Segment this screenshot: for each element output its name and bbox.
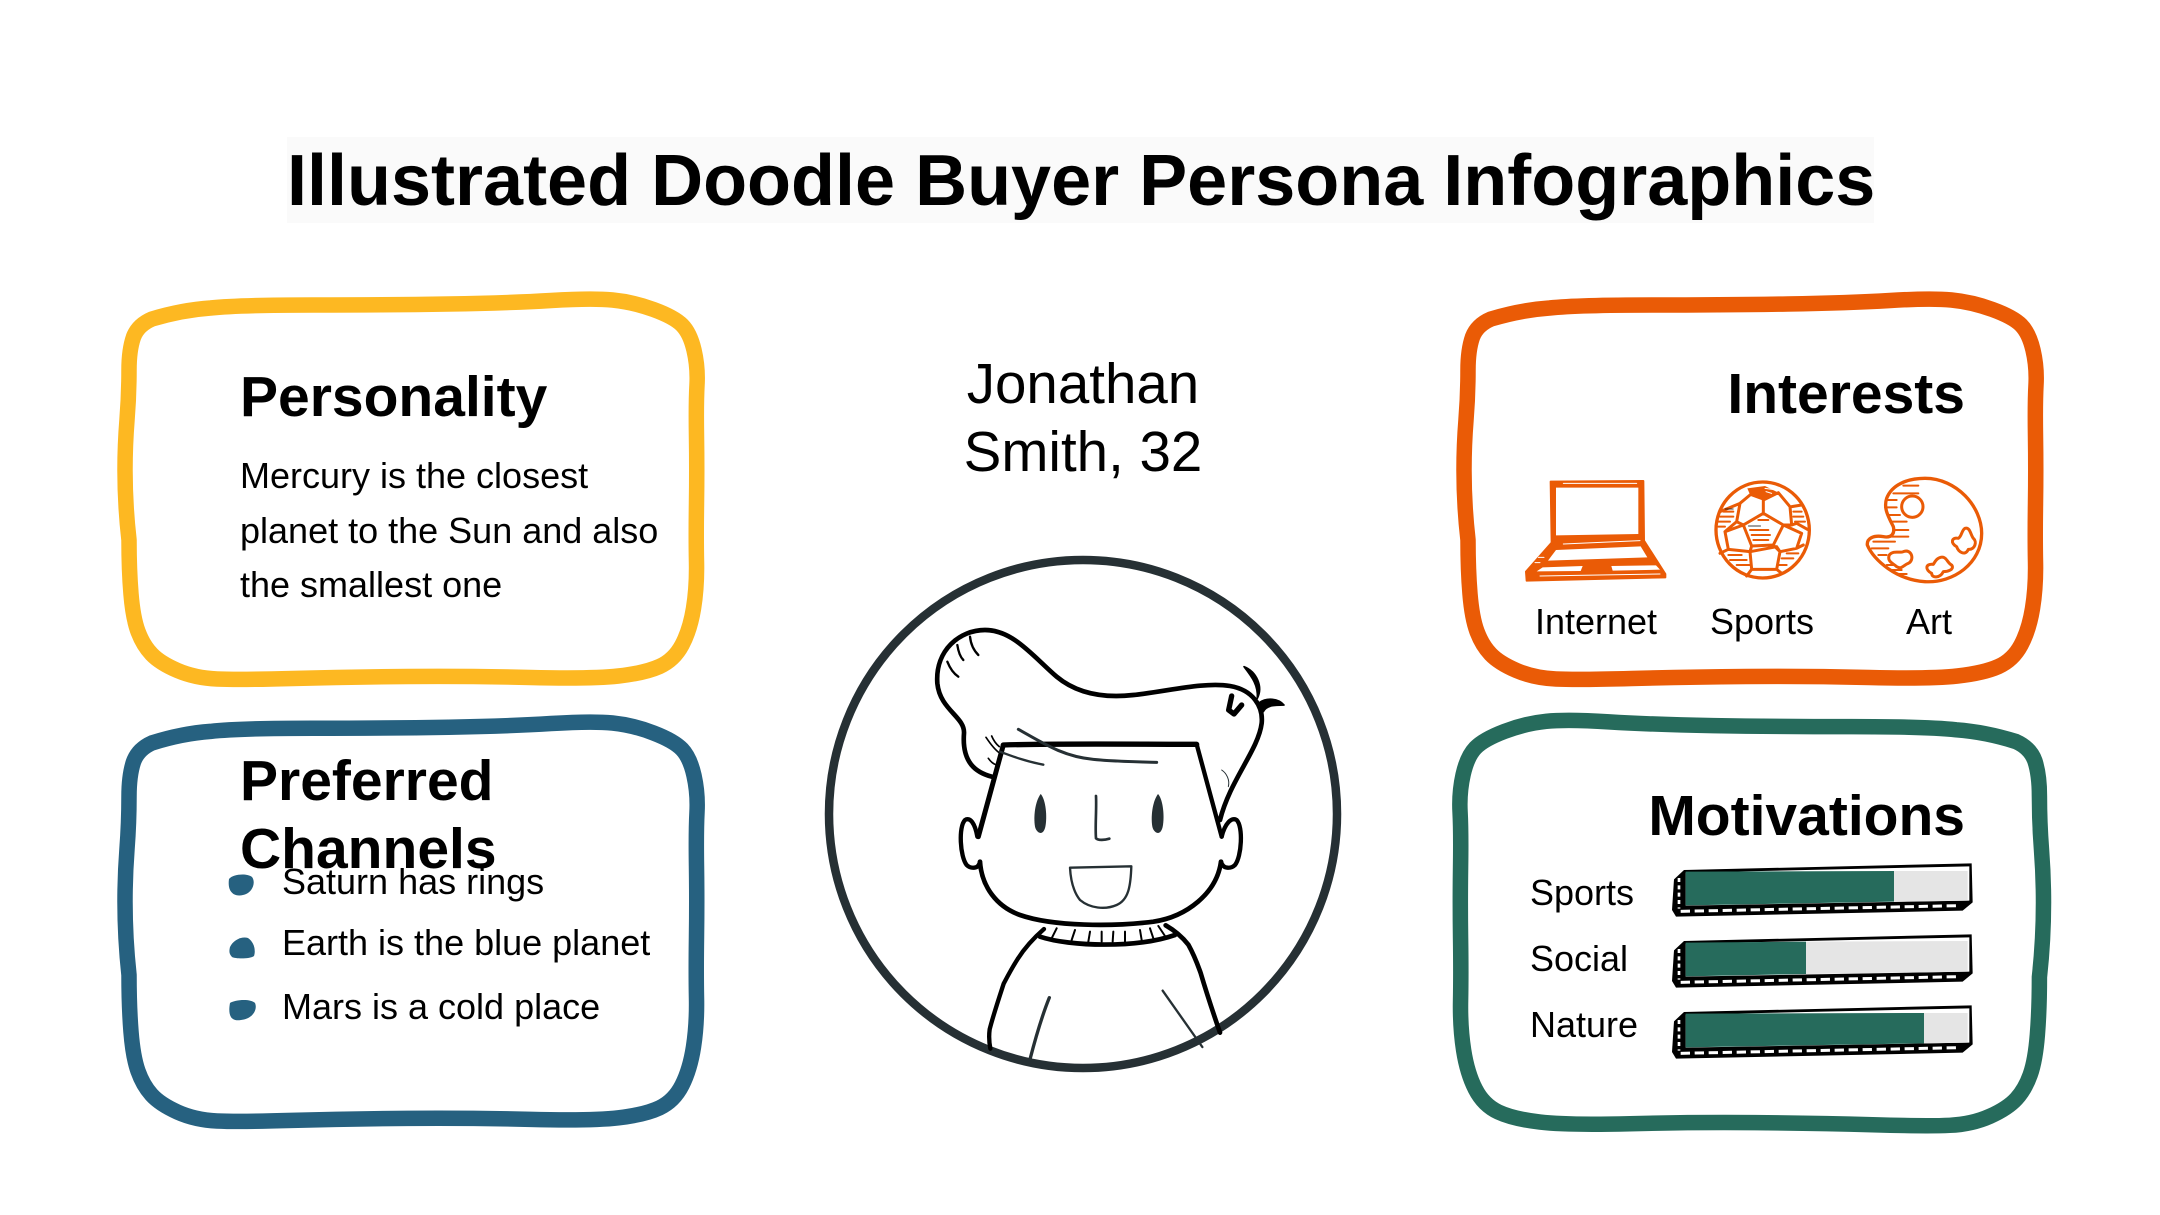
icon: soccer ball — [1716, 482, 1809, 578]
interests heading: Interests — [1727, 362, 1965, 426]
bar chart: social — [1672, 934, 1973, 988]
preferred channels heading: Channels — [240, 817, 497, 881]
motivation labels — [1530, 872, 1638, 1045]
panel: preferred channels — [125, 722, 697, 1121]
interest labels: Art — [1906, 601, 1952, 642]
motivations heading: Motivations — [1648, 784, 1965, 848]
panel: personality — [125, 299, 697, 679]
interest labels — [1535, 601, 1952, 642]
bar chart: sports — [1672, 863, 1973, 917]
bullet: Saturn: Saturn has rings — [282, 861, 544, 902]
bar chart: nature — [1672, 1005, 1973, 1059]
interest labels: Sports — [1710, 601, 1814, 642]
bullet: Earth: Earth is the blue planet — [282, 922, 650, 963]
title: Illustrated Doodle Buyer Persona Infographics — [287, 141, 1875, 221]
preferred channels border — [125, 722, 697, 1121]
persona name — [964, 352, 1202, 483]
icon: paint palette — [1867, 478, 1982, 582]
avatar portrait — [829, 560, 1337, 1068]
personality description: Mercury is the closest — [240, 455, 588, 496]
icon: laptop — [1526, 481, 1665, 581]
persona name: Smith, 32 — [964, 420, 1202, 483]
motivation labels: Nature — [1530, 1004, 1638, 1045]
illustrated character — [937, 630, 1284, 1059]
personality description: the smallest one — [240, 564, 502, 605]
preferred channels heading: Preferred — [240, 749, 493, 813]
personality description: planet to the Sun and also — [240, 510, 658, 551]
personality description — [240, 455, 658, 605]
interests border — [1464, 299, 2036, 679]
motivation labels: Social — [1530, 938, 1628, 979]
motivation labels: Sports — [1530, 872, 1634, 913]
panel: motivations — [1460, 720, 2044, 1126]
personality border — [125, 299, 697, 679]
panel: interests — [1464, 299, 2036, 679]
persona name: Jonathan — [967, 352, 1199, 415]
preferred channels heading — [240, 749, 497, 881]
personality heading: Personality — [240, 365, 548, 429]
motivations border — [1460, 720, 2044, 1126]
bullet: Mars: Mars is a cold place — [282, 986, 600, 1027]
avatar circle — [829, 560, 1337, 1068]
interest labels: Internet — [1535, 601, 1657, 642]
